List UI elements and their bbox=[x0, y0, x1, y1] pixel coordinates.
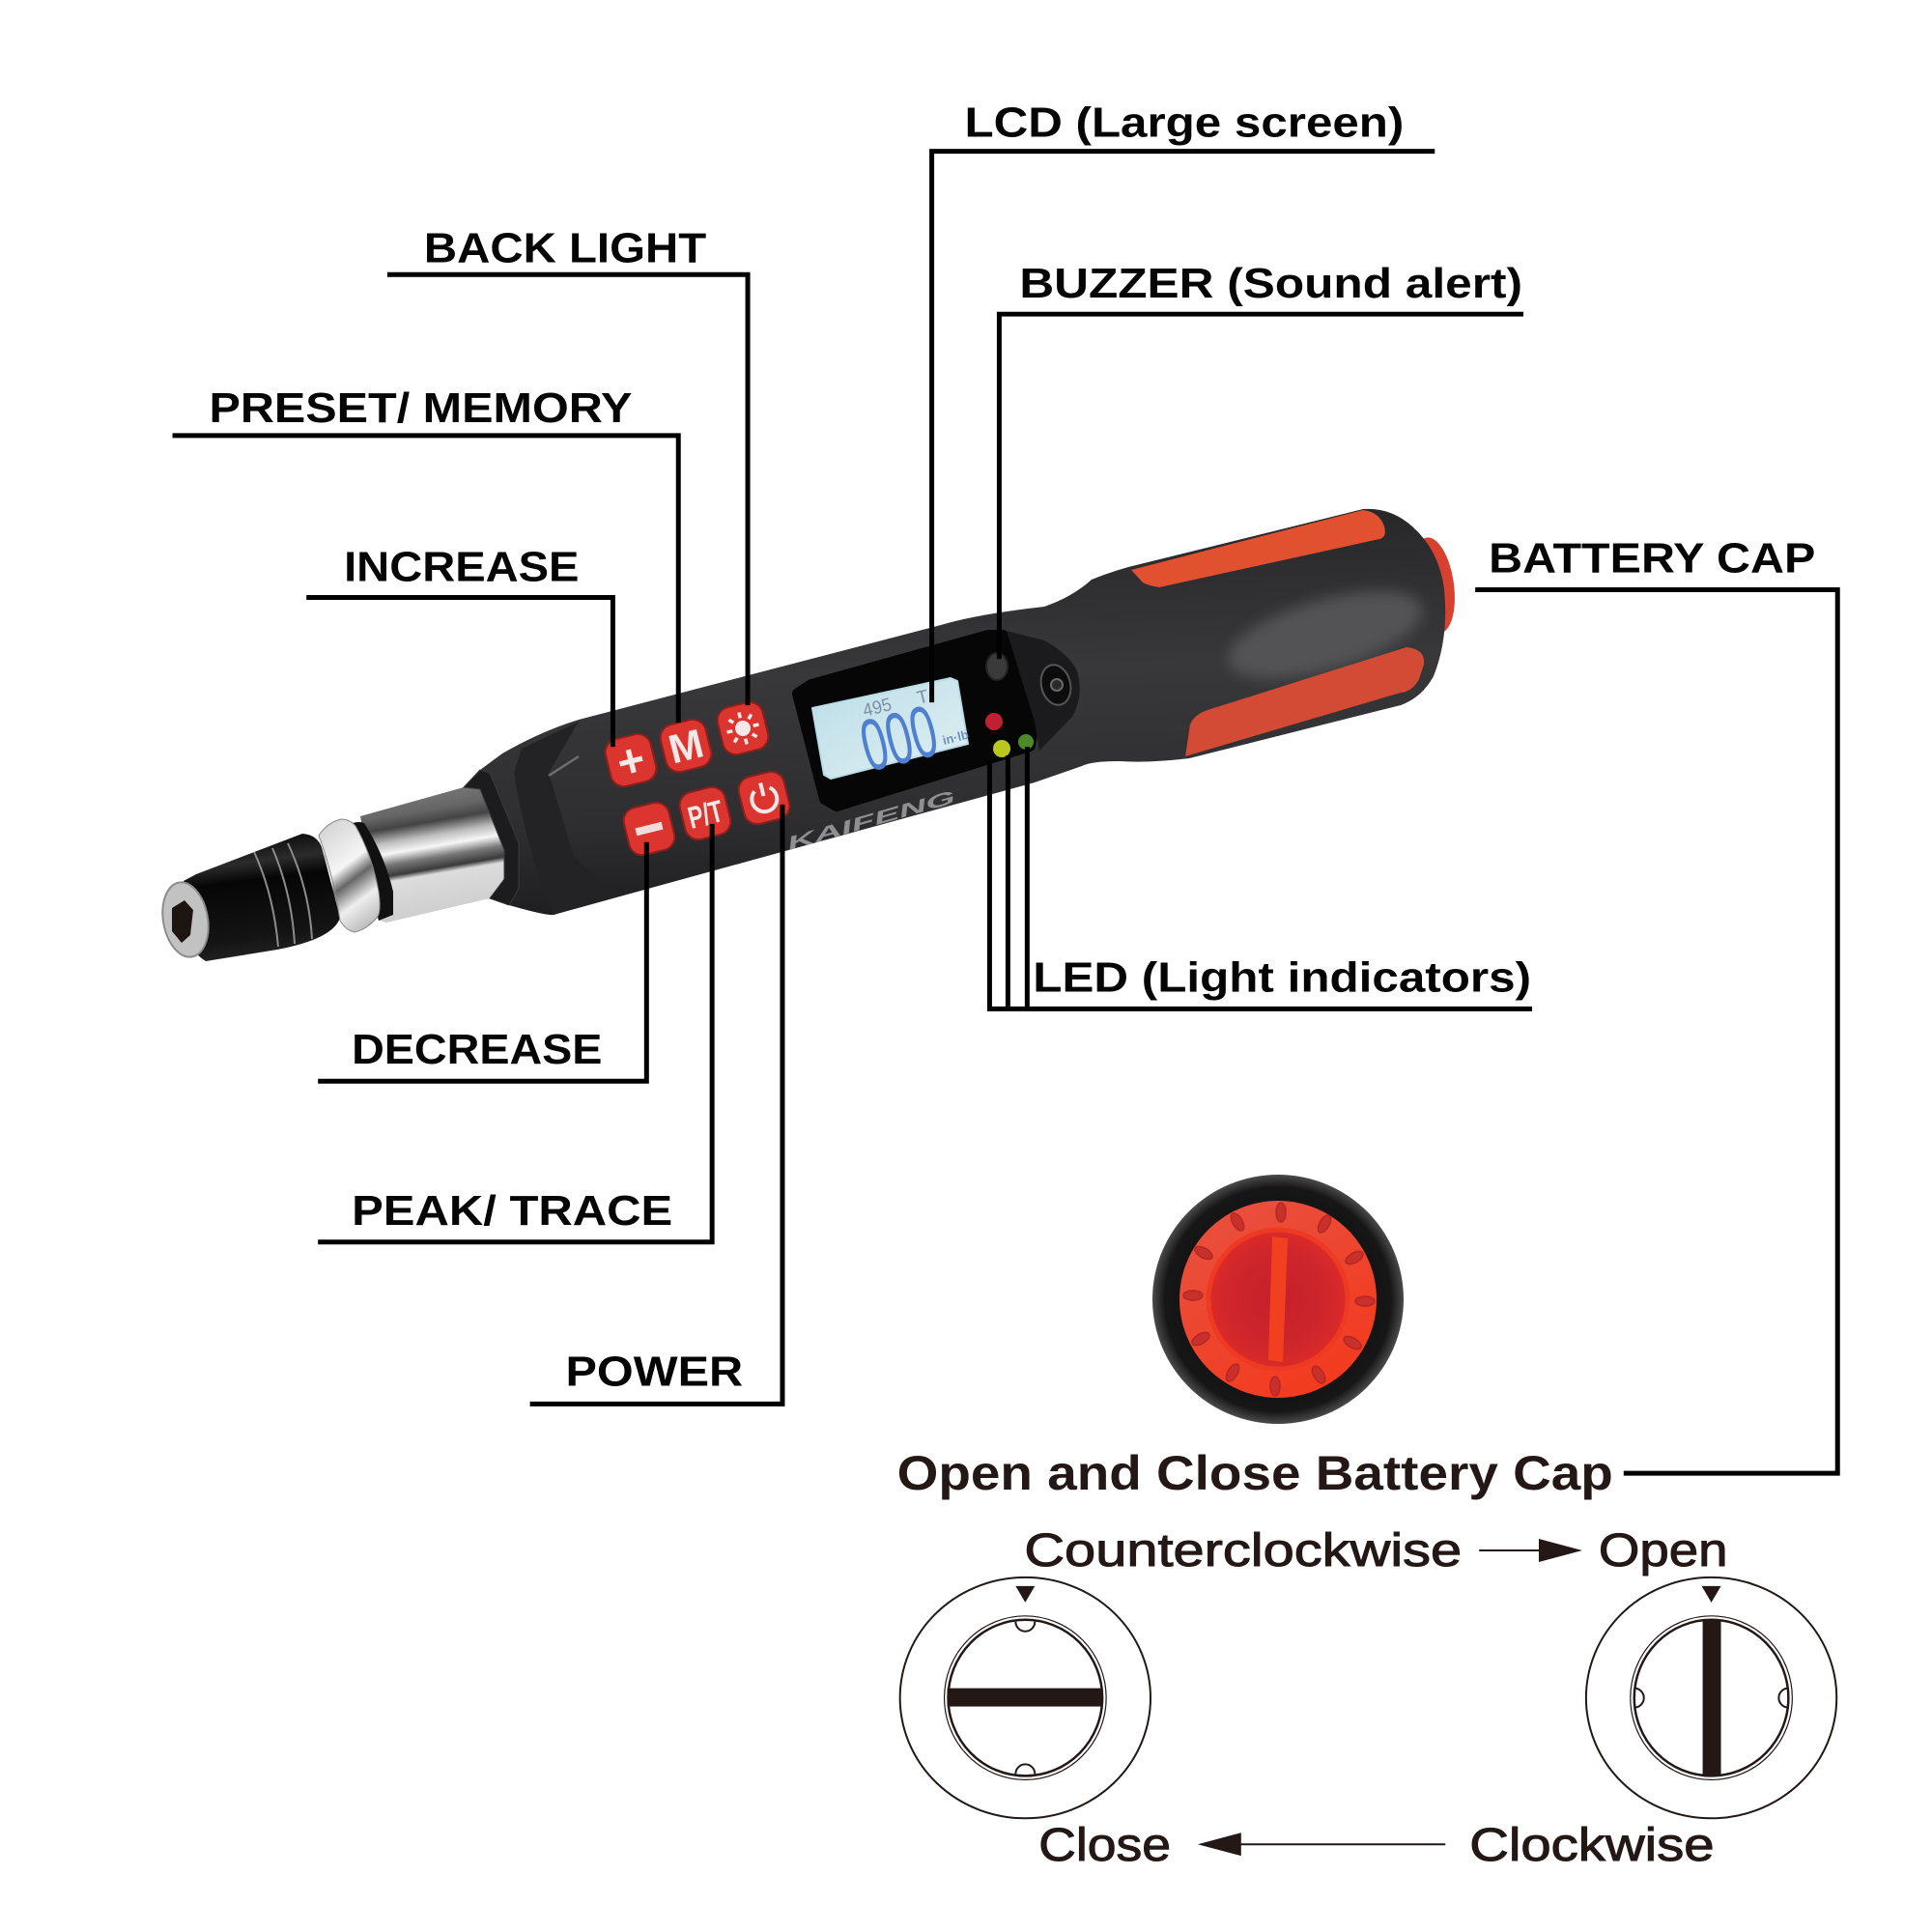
dial: closed position bbox=[900, 1577, 1151, 1818]
cap recess bbox=[1208, 1230, 1348, 1369]
button: memory: M bbox=[664, 720, 708, 773]
button: power bbox=[736, 769, 792, 827]
facet highlight bbox=[549, 756, 579, 776]
callout: PEAK/ TRACE bbox=[318, 824, 712, 1242]
LCD small readout: 495 bbox=[861, 695, 894, 722]
callout: PRESET/ MEMORY bbox=[173, 384, 678, 723]
callout: DECREASE bbox=[318, 842, 646, 1081]
open slot bar bbox=[1703, 1620, 1721, 1775]
arrow: to close bbox=[1198, 1833, 1445, 1856]
close label: Close bbox=[1038, 1820, 1171, 1871]
button: peak trace bbox=[677, 784, 733, 842]
callout: LED bbox=[989, 747, 1532, 1009]
cap slot bar bbox=[1268, 1236, 1288, 1362]
callout: BUZZER: BUZZER (Sound alert) bbox=[1019, 260, 1522, 307]
LED green bbox=[1018, 734, 1034, 750]
callout: LCD bbox=[932, 99, 1435, 702]
LCD unit: in·lb bbox=[941, 727, 970, 748]
brand print: KAIFENG bbox=[785, 787, 958, 855]
button: plus bbox=[603, 731, 660, 792]
counterclockwise label: Counterclockwise bbox=[1024, 1525, 1462, 1577]
chrome flange bbox=[319, 819, 380, 932]
callout: LCD: LCD (Large screen) bbox=[964, 99, 1404, 147]
screw bbox=[1037, 662, 1075, 708]
battery cap photo bbox=[1152, 1175, 1404, 1424]
button: memory bbox=[658, 717, 714, 775]
LCD main digits: 000 bbox=[853, 690, 946, 787]
callout: LED: LED (Light indicators) bbox=[1033, 953, 1531, 1001]
top red grip bbox=[1131, 510, 1385, 587]
clockwise label: Clockwise bbox=[1469, 1820, 1715, 1871]
cap finger notches bbox=[1183, 1203, 1375, 1396]
button: backlight bbox=[715, 699, 771, 757]
tool body and handle bbox=[480, 509, 1445, 915]
screw plate bbox=[1007, 631, 1080, 751]
holder grooves bbox=[254, 843, 312, 947]
callout: PEAK/ TRACE: PEAK/ TRACE bbox=[352, 1187, 672, 1235]
black bit holder bbox=[180, 834, 340, 961]
handle highlight bbox=[1219, 574, 1432, 696]
buzzer bbox=[986, 653, 1008, 680]
callout: BATTERY CAP bbox=[1475, 535, 1837, 1473]
open label: Open bbox=[1599, 1525, 1728, 1577]
closed notches bbox=[1015, 1622, 1035, 1774]
LED red bbox=[985, 713, 1003, 730]
callout: INCREASE: INCREASE bbox=[344, 543, 579, 590]
black o-ring bbox=[353, 822, 393, 921]
battery cap heading: Open and Close Battery Cap bbox=[897, 1446, 1613, 1500]
bottom red grip bbox=[1185, 647, 1424, 756]
callout: DECREASE: DECREASE bbox=[352, 1026, 602, 1073]
button: peak trace: P/T bbox=[684, 793, 726, 836]
arrow: to open bbox=[1479, 1539, 1582, 1562]
button: minus bbox=[621, 800, 677, 858]
open pointer bbox=[1702, 1586, 1721, 1603]
keypad facet bbox=[514, 722, 618, 915]
callout: POWER bbox=[530, 805, 782, 1404]
callout: BACK LIGHT: BACK LIGHT bbox=[424, 224, 706, 271]
cap red disc bbox=[1179, 1201, 1377, 1398]
LCD screen bbox=[812, 678, 970, 787]
battery cap edge bbox=[1406, 535, 1461, 636]
LCD indicator T: T bbox=[915, 687, 931, 709]
callout: BATTERY CAP: BATTERY CAP bbox=[1489, 535, 1815, 582]
chrome sleeve bbox=[360, 787, 504, 923]
LED yellow bbox=[993, 740, 1010, 757]
callout: POWER: POWER bbox=[566, 1348, 743, 1395]
rubber front ring bbox=[464, 770, 519, 905]
callout: PRESET/ MEMORY: PRESET/ MEMORY bbox=[209, 384, 632, 432]
open notches bbox=[1634, 1689, 1788, 1708]
button: plus: + bbox=[611, 733, 650, 790]
holder front face bbox=[157, 879, 213, 960]
callout: INCREASE bbox=[306, 543, 612, 747]
dial: open position bbox=[1586, 1577, 1836, 1818]
callout: BUZZER bbox=[999, 260, 1523, 659]
closed pointer bbox=[1015, 1586, 1035, 1603]
hex socket bbox=[172, 900, 193, 943]
closed slot bar bbox=[948, 1689, 1102, 1707]
torque screwdriver product photo bbox=[157, 509, 1461, 961]
LCD bezel bbox=[798, 636, 1034, 806]
callout: BACK LIGHT bbox=[387, 224, 748, 705]
steel neck bbox=[316, 844, 360, 920]
